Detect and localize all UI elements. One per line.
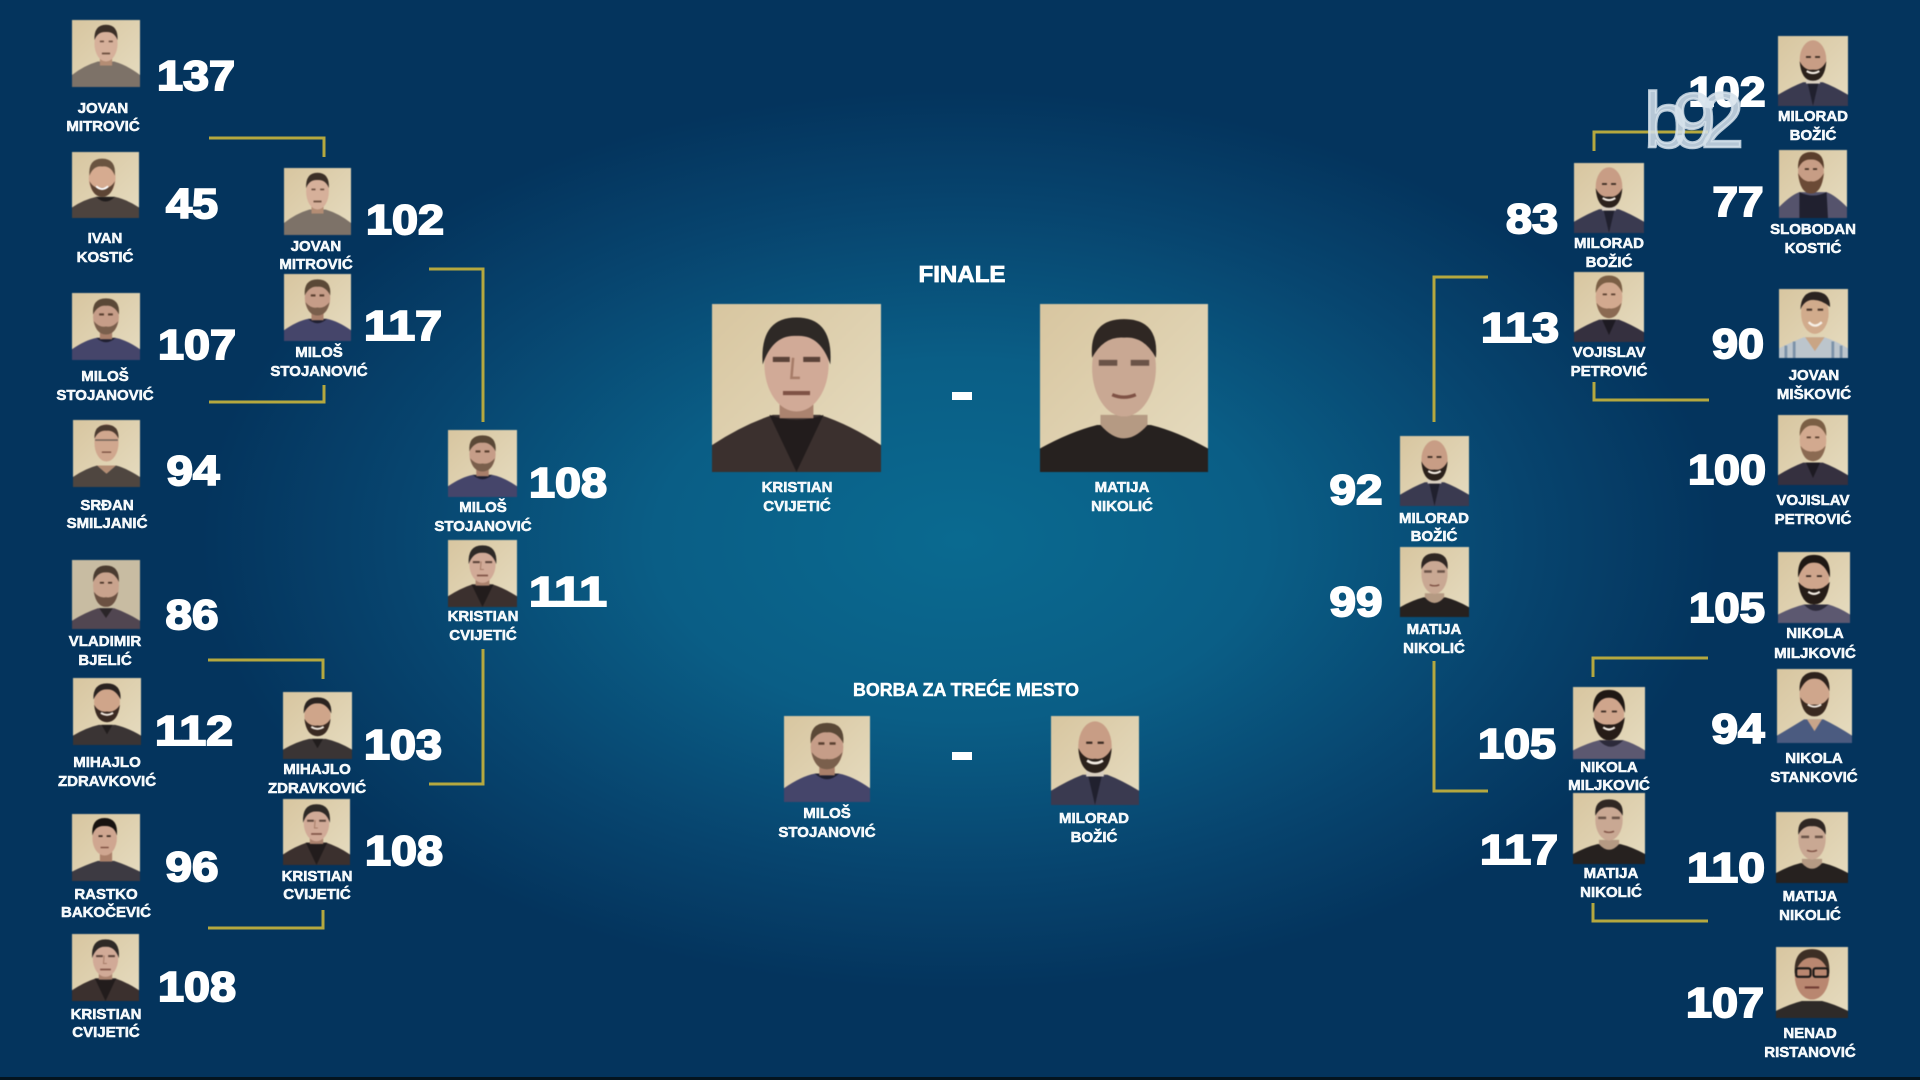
competitor: Nikola Miljković 105: 105	[1689, 584, 1765, 631]
heading: third-place match: BORBA ZA TREĆE MESTO	[853, 679, 1079, 700]
competitor: Miloš Stojanović 108: MILOŠ	[459, 498, 507, 516]
competitor: Kristian Cvijetić 111	[448, 540, 607, 644]
competitor: Milorad Božić 83: 83	[1506, 195, 1558, 242]
competitor: Slobodan Kostić 77: KOSTIĆ	[1785, 239, 1841, 257]
finalist: Matija Nikolić: MATIJA	[1095, 479, 1150, 496]
connector: Jovan Mitrović / Ivan Kostić	[209, 138, 324, 157]
competitor: Kristian Cvijetić 108: CVIJETIĆ	[72, 1023, 140, 1041]
competitor: Vojislav Petrović 113: PETROVIĆ	[1571, 362, 1648, 380]
heading: Finale: FINALE	[918, 261, 1006, 287]
connector: Jovan Mišković / Vojislav Petrović	[1594, 382, 1709, 400]
competitor: Miloš Stojanović 107: MILOŠ	[81, 367, 129, 385]
competitor: Milorad Božić 102: 102	[1688, 68, 1766, 115]
connector: left quarterfinal to Miloš	[429, 269, 483, 422]
finalist: Matija Nikolić	[1040, 304, 1208, 515]
competitor: Kristian Cvijetić 108: KRISTIAN	[71, 1006, 141, 1023]
connector: right quarterfinal to Milorad	[1434, 277, 1488, 422]
competitor: Miloš Stojanović 107: STOJANOVIĆ	[56, 386, 154, 404]
competitor: Jovan Mitrović 137: JOVAN	[78, 100, 128, 117]
competitor: Kristian Cvijetić 111: KRISTIAN	[448, 608, 518, 625]
competitor: Mihajlo Zdravković 103: ZDRAVKOVIĆ	[268, 779, 366, 797]
competitor: Matija Nikolić 110	[1687, 812, 1848, 924]
competitor: Nikola Miljković 105: NIKOLA	[1580, 759, 1638, 776]
competitor: Milorad Božić 102	[1688, 36, 1848, 144]
competitor: Kristian Cvijetić 108: 108	[158, 963, 236, 1010]
competitor: Kristian Cvijetić 108: CVIJETIĆ	[283, 885, 351, 903]
competitor: Nikola Miljković 105: 105	[1478, 720, 1556, 767]
competitor: Milorad Božić 92: BOŽIĆ	[1411, 527, 1457, 545]
competitor: Miloš Stojanović 117: STOJANOVIĆ	[270, 362, 368, 380]
competitor: Kristian Cvijetić 111: CVIJETIĆ	[449, 626, 517, 644]
finale dash	[952, 392, 972, 400]
competitor: Vladimir Bjelić 86	[69, 560, 218, 669]
competitor: Jovan Mitrović 137	[66, 20, 235, 135]
competitor: Miloš Stojanović 117	[270, 274, 442, 380]
competitor: Ivan Kostić 45: KOSTIĆ	[77, 248, 133, 266]
third-place: Miloš Stojanović: STOJANOVIĆ	[778, 823, 876, 841]
third-place: Miloš Stojanović: MILOŠ	[803, 804, 851, 822]
competitor: Nenad Ristanović 107: RISTANOVIĆ	[1764, 1043, 1856, 1061]
competitor: Vladimir Bjelić 86: BJELIĆ	[78, 651, 132, 669]
competitor: Mihajlo Zdravković 103: MIHAJLO	[283, 761, 351, 778]
competitor: Kristian Cvijetić 111: 111	[529, 568, 607, 615]
competitor: Nikola Miljković 105: NIKOLA	[1786, 625, 1844, 642]
competitor: Vojislav Petrović 113: 113	[1481, 304, 1559, 351]
competitor: Srđan Smiljanić 94: SMILJANIĆ	[67, 514, 148, 532]
competitor: Rastko Bakočević 96: 96	[166, 843, 218, 890]
competitor: Mihajlo Zdravković 103: 103	[364, 721, 442, 768]
competitor: Kristian Cvijetić 108: 108	[365, 827, 443, 874]
competitor: Nikola Stanković 94	[1712, 669, 1858, 786]
third-place: Milorad Božić: BOŽIĆ	[1071, 828, 1117, 846]
competitor: Matija Nikolić 110: 110	[1687, 844, 1765, 891]
competitor: Matija Nikolić 99	[1330, 547, 1469, 657]
competitor: Miloš Stojanović 108: STOJANOVIĆ	[434, 517, 532, 535]
competitor: Kristian Cvijetić 108: KRISTIAN	[282, 868, 352, 885]
connector: Miloš Stojanović / Srđan Smiljanić	[209, 385, 324, 402]
competitor: Vojislav Petrović 113	[1481, 272, 1648, 380]
third-place dash	[952, 752, 972, 760]
finalist: Kristian Cvijetić	[712, 304, 881, 515]
competitor: Matija Nikolić 99: MATIJA	[1407, 621, 1462, 638]
competitor: Kristian Cvijetić 108	[71, 934, 236, 1041]
competitor: Matija Nikolić 117: MATIJA	[1584, 865, 1639, 882]
competitor: Milorad Božić 92: MILORAD	[1399, 510, 1469, 527]
competitor: Vladimir Bjelić 86: VLADIMIR	[69, 633, 141, 650]
third-place: Milorad Božić	[1051, 716, 1139, 846]
competitor: Matija Nikolić 99: 99	[1330, 578, 1382, 625]
competitor: Miloš Stojanović 107	[56, 293, 236, 404]
competitor: Matija Nikolić 117	[1480, 793, 1645, 901]
competitor: Ivan Kostić 45	[72, 152, 218, 266]
competitor: Mihajlo Zdravković 112: MIHAJLO	[73, 754, 141, 771]
competitor: Matija Nikolić 110: NIKOLIĆ	[1779, 906, 1841, 924]
competitor: Ivan Kostić 45: IVAN	[88, 230, 122, 247]
competitor: Matija Nikolić 99: NIKOLIĆ	[1403, 639, 1465, 657]
finalist: Kristian Cvijetić: KRISTIAN	[762, 479, 832, 496]
competitor: Milorad Božić 83: BOŽIĆ	[1586, 253, 1632, 271]
competitor: Slobodan Kostić 77	[1712, 150, 1856, 257]
competitor: Matija Nikolić 110: MATIJA	[1783, 888, 1838, 905]
competitor: Miloš Stojanović 108: 108	[529, 459, 607, 506]
competitor: Jovan Mitrović 137: MITROVIĆ	[66, 117, 140, 135]
competitor: Nikola Stanković 94: STANKOVIĆ	[1770, 768, 1858, 786]
competitor: Mihajlo Zdravković 112: 112	[155, 707, 233, 754]
competitor: Jovan Mišković 90	[1712, 289, 1851, 403]
competitor: Jovan Mišković 90: MIŠKOVIĆ	[1777, 385, 1851, 403]
competitor: Kristian Cvijetić 108	[282, 799, 443, 903]
logo: b92 watermark: b92	[1644, 76, 1744, 164]
competitor: Srđan Smiljanić 94	[67, 420, 220, 532]
competitor: Milorad Božić 83	[1506, 163, 1644, 271]
competitor: Nikola Miljković 105: MILJKOVIĆ	[1774, 644, 1856, 662]
competitor: Miloš Stojanović 117: 117	[364, 302, 442, 349]
connector: right quarterfinal to Matija	[1434, 661, 1488, 791]
connector: left quarterfinal to Kristian	[429, 649, 483, 784]
competitor: Milorad Božić 92: 92	[1330, 466, 1382, 513]
competitor: Miloš Stojanović 107: 107	[158, 321, 236, 368]
competitor: Rastko Bakočević 96: BAKOČEVIĆ	[61, 903, 151, 921]
competitor: Milorad Božić 83: MILORAD	[1574, 235, 1644, 252]
competitor: Nikola Miljković 105	[1478, 687, 1650, 794]
competitor: Srđan Smiljanić 94: 94	[166, 447, 220, 494]
competitor: Rastko Bakočević 96	[61, 814, 218, 921]
competitor: Nikola Stanković 94: 94	[1712, 705, 1765, 752]
connector: Nikola Miljković / Nikola Stanković	[1593, 658, 1708, 677]
competitor: Jovan Mitrović 102	[279, 168, 444, 273]
competitor: Jovan Mišković 90: JOVAN	[1789, 367, 1839, 384]
competitor: Mihajlo Zdravković 112: ZDRAVKOVIĆ	[58, 772, 156, 790]
finalist: Kristian Cvijetić: CVIJETIĆ	[763, 497, 831, 515]
competitor: Matija Nikolić 117: 117	[1480, 826, 1558, 873]
competitor: Vojislav Petrović 100: 100	[1688, 446, 1766, 493]
connector: Milorad Božić / Slobodan Kostić	[1594, 132, 1708, 151]
competitor: Milorad Božić 102: MILORAD	[1778, 108, 1848, 125]
competitor: Vojislav Petrović 100: PETROVIĆ	[1775, 510, 1852, 528]
competitor: Ivan Kostić 45: 45	[166, 180, 218, 227]
competitor: Milorad Božić 102: BOŽIĆ	[1790, 126, 1836, 144]
competitor: Jovan Mitrović 102: MITROVIĆ	[279, 255, 353, 273]
competitor: Mihajlo Zdravković 103	[268, 692, 442, 797]
competitor: Milorad Božić 92	[1330, 436, 1469, 545]
competitor: Nenad Ristanović 107: NENAD	[1783, 1025, 1837, 1042]
competitor: Slobodan Kostić 77: SLOBODAN	[1770, 221, 1856, 238]
competitor: Jovan Mitrović 102: JOVAN	[291, 238, 341, 255]
competitor: Matija Nikolić 117: NIKOLIĆ	[1580, 883, 1642, 901]
competitor: Vojislav Petrović 100	[1688, 415, 1852, 528]
competitor: Vojislav Petrović 100: VOJISLAV	[1776, 492, 1850, 509]
third-place: Miloš Stojanović	[778, 716, 876, 841]
finalist: Matija Nikolić: NIKOLIĆ	[1091, 497, 1153, 515]
competitor: Nenad Ristanović 107: 107	[1686, 979, 1764, 1026]
competitor: Miloš Stojanović 108	[434, 430, 607, 535]
competitor: Slobodan Kostić 77: 77	[1712, 178, 1764, 225]
competitor: Jovan Mišković 90: 90	[1712, 320, 1764, 367]
competitor: Vladimir Bjelić 86: 86	[166, 591, 218, 638]
competitor: Vojislav Petrović 113: VOJISLAV	[1572, 344, 1646, 361]
third-place: Milorad Božić: MILORAD	[1059, 810, 1129, 827]
competitor: Mihajlo Zdravković 112	[58, 678, 233, 790]
connector: Vladimir Bjelić / Mihajlo Zdravković	[208, 660, 323, 679]
connector: Rastko Bakočević / Kristian Cvijetić	[208, 910, 323, 928]
connector: Matija Nikolić / Nenad Ristanović	[1593, 903, 1708, 921]
competitor: Rastko Bakočević 96: RASTKO	[74, 886, 138, 903]
competitor: Nikola Miljković 105: MILJKOVIĆ	[1568, 776, 1650, 794]
competitor: Jovan Mitrović 102: 102	[366, 196, 444, 243]
competitor: Jovan Mitrović 137: 137	[157, 52, 235, 99]
competitor: Nikola Stanković 94: NIKOLA	[1785, 750, 1843, 767]
competitor: Srđan Smiljanić 94: SRĐAN	[80, 497, 134, 514]
competitor: Nikola Miljković 105	[1689, 552, 1856, 662]
competitor: Nenad Ristanović 107	[1686, 947, 1856, 1061]
competitor: Miloš Stojanović 117: MILOŠ	[295, 343, 343, 361]
